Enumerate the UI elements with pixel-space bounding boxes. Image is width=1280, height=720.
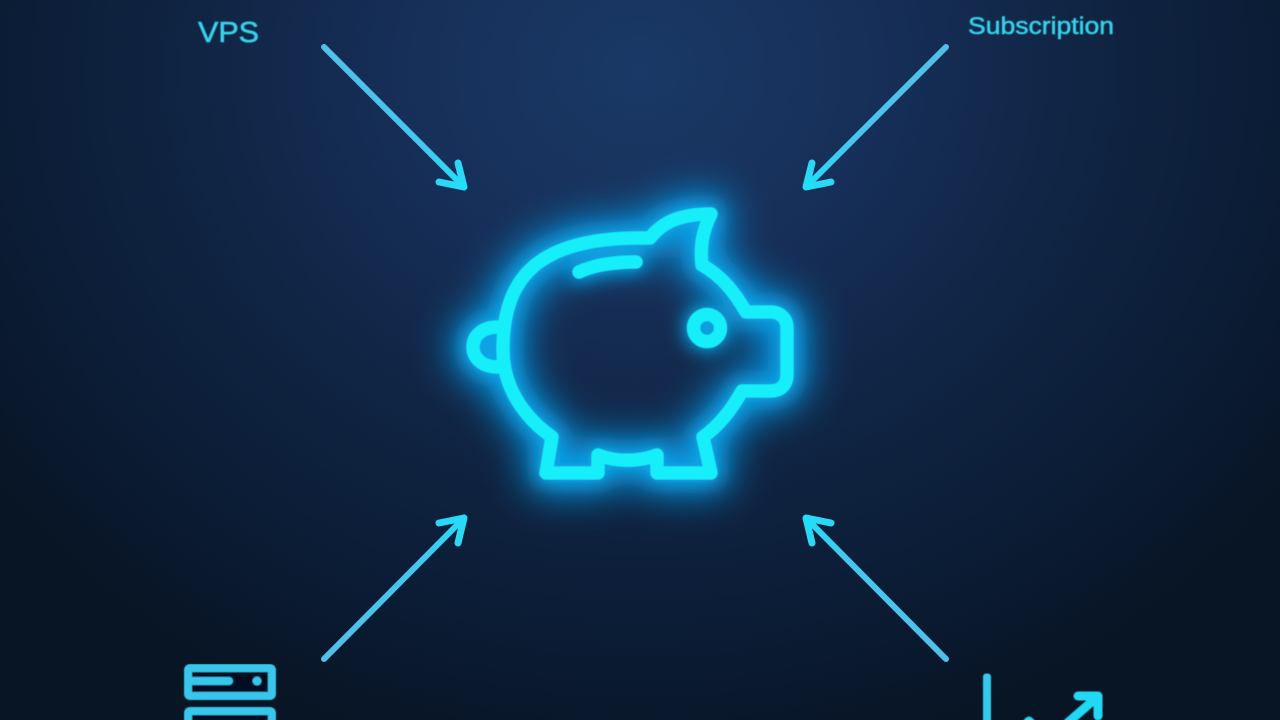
arrow: bottom right bbox=[806, 518, 946, 659]
pig outline bbox=[473, 214, 787, 473]
icon: server stack bbox=[188, 668, 272, 720]
label: VPS: VPS bbox=[198, 17, 259, 49]
arrow: top right bbox=[806, 47, 946, 187]
icon: glowing piggy bank bbox=[473, 214, 787, 473]
arrow: bottom left bbox=[324, 518, 464, 659]
icon: growth chart bbox=[987, 677, 1098, 720]
arrow: top left bbox=[324, 47, 464, 187]
label: Subscription: Subscription bbox=[968, 13, 1114, 40]
